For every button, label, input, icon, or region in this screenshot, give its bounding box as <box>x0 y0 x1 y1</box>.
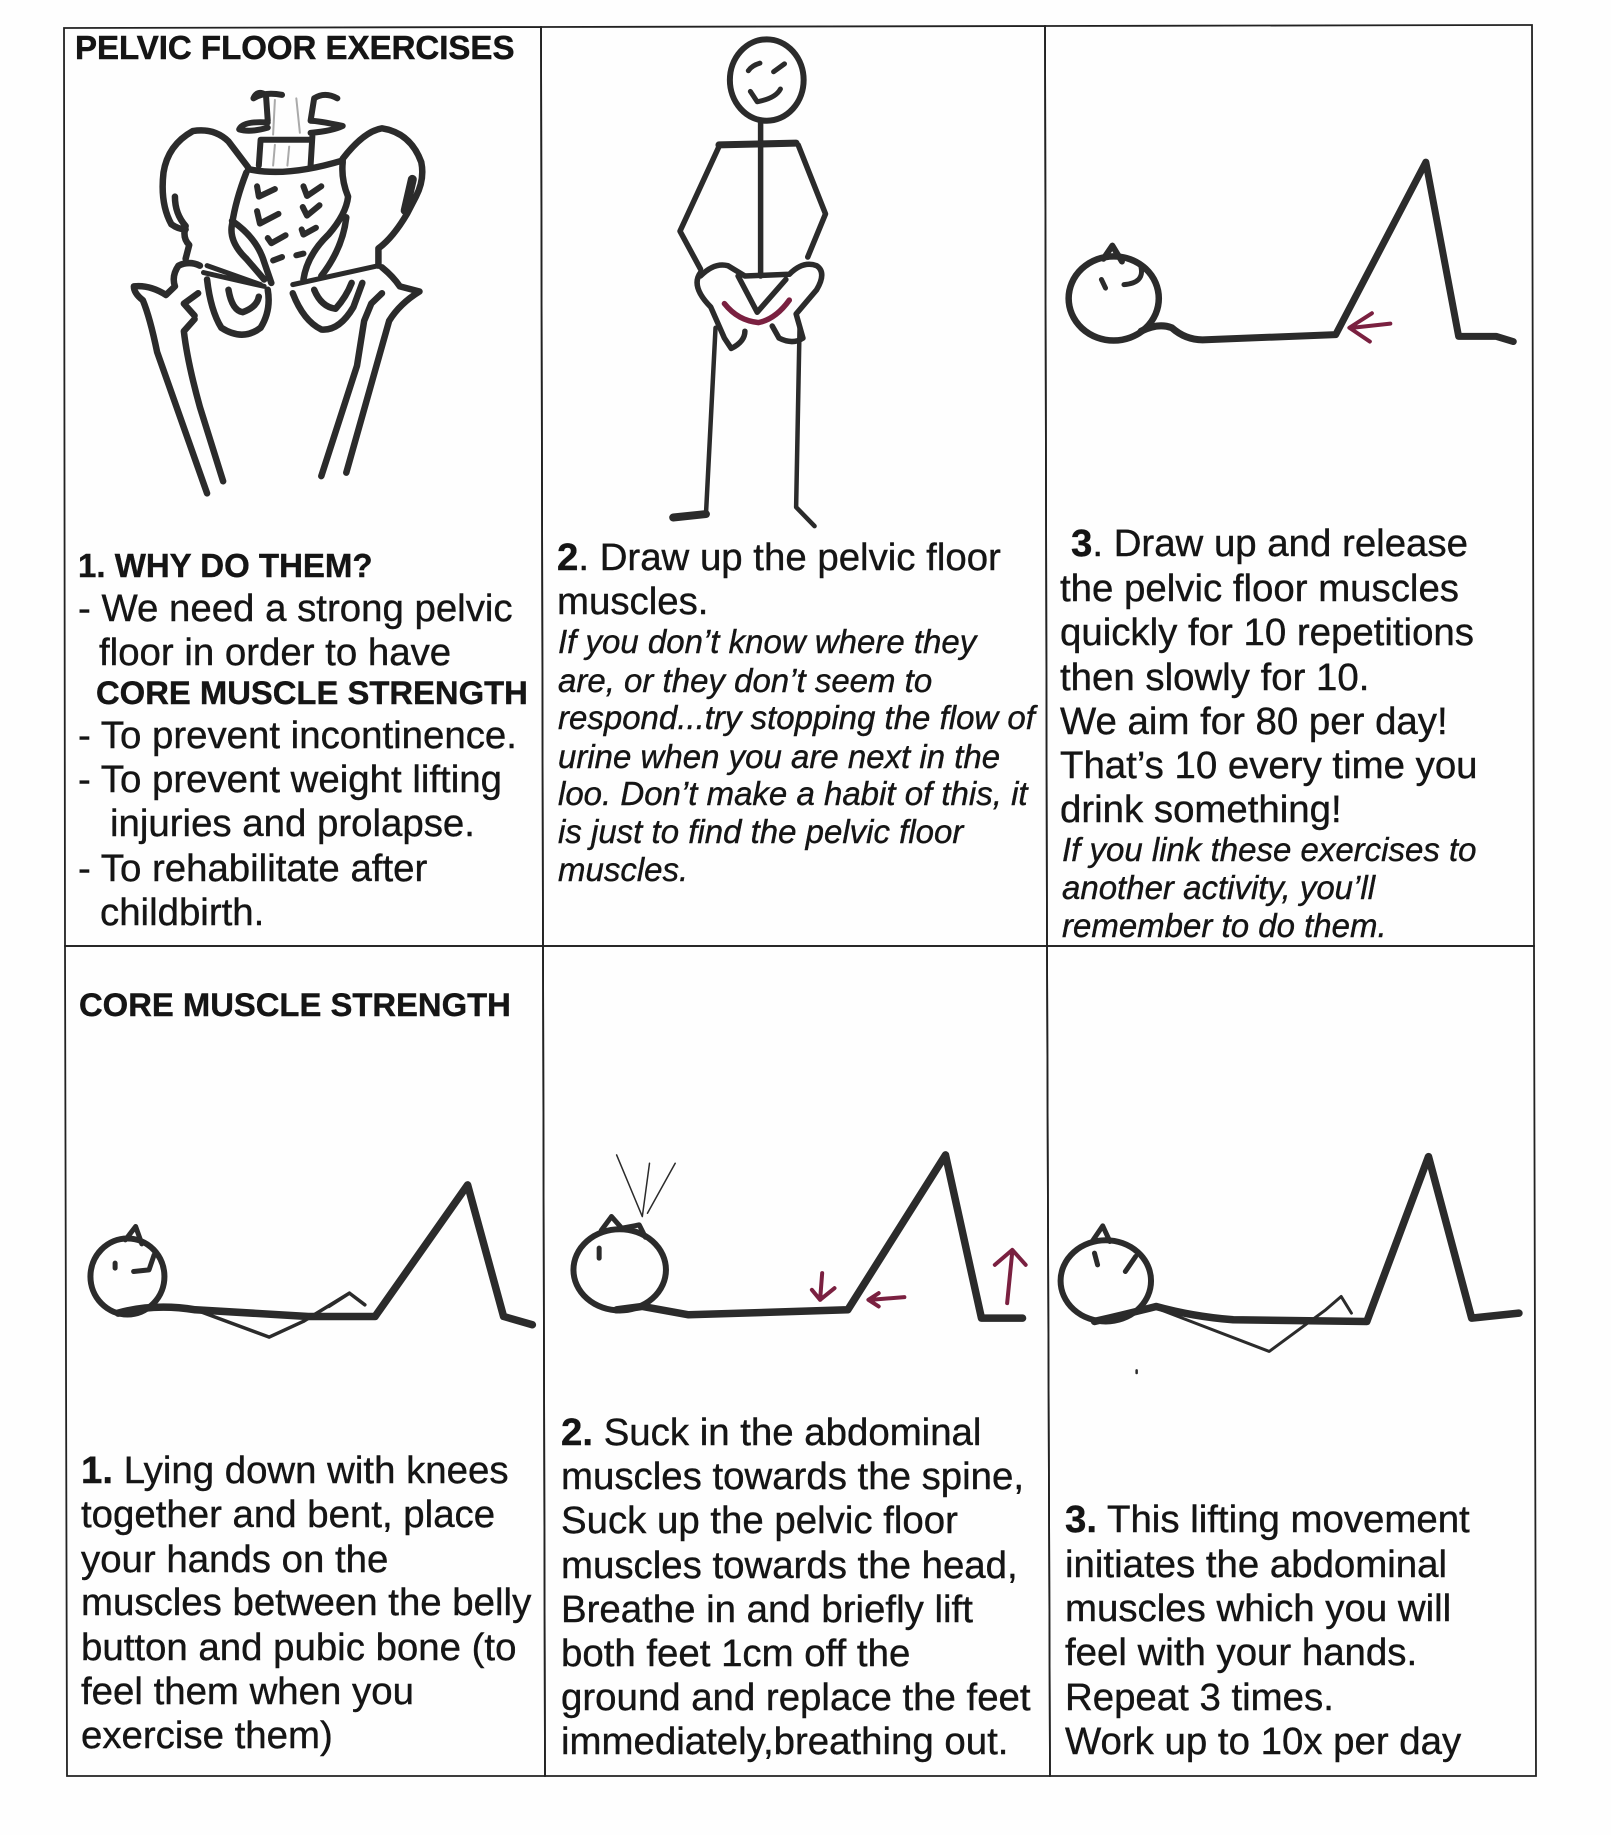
text block: why do them: - We need a strong pelvic <box>78 587 513 630</box>
text block: core step 1 <box>81 1449 532 1757</box>
text block: why do them: - To prevent weight lifting <box>78 758 502 801</box>
text block: step 2: 2. Draw up the pelvic floor <box>557 536 1001 579</box>
text block: core step 3: muscles which you will <box>1065 1587 1451 1630</box>
text block: core step 2: immediately,breathing out. <box>561 1720 1008 1763</box>
icon: lying figure hands raised <box>1061 1157 1519 1373</box>
text block: step 3 <box>1060 522 1478 944</box>
text block: core step 1: muscles between the belly <box>81 1581 532 1624</box>
text block: why do them: childbirth. <box>100 891 264 934</box>
text block: core step 2 <box>561 1411 1031 1763</box>
text block: why do them: 1. WHY DO THEM? <box>78 547 373 584</box>
text block: step 3: That’s 10 every time you <box>1060 744 1478 787</box>
text block: core step 3: 3. This lifting movement <box>1065 1498 1470 1541</box>
text block: core step 1: exercise them) <box>81 1714 333 1757</box>
text block: core step 2: muscles towards the spine, <box>561 1455 1024 1498</box>
text block: core step 1: your hands on the <box>81 1538 388 1581</box>
text block: step 3: the pelvic floor muscles <box>1060 567 1459 610</box>
text block: core step 2: Suck up the pelvic floor <box>561 1499 958 1542</box>
panel: core step 1 <box>65 946 545 1776</box>
panel: core step 3 <box>1047 946 1536 1776</box>
text block: core step 3: Work up to 10x per day <box>1065 1720 1462 1763</box>
panel: why do them <box>64 27 543 946</box>
text block: step 2: respond...try stopping the flow of <box>558 699 1039 736</box>
text block: step 2: urine when you are next in the <box>558 738 1000 775</box>
text block: step 3: then slowly for 10. <box>1060 656 1369 699</box>
text block: core step 2: 2. Suck in the abdominal <box>561 1411 981 1454</box>
text block: why do them: injuries and prolapse. <box>110 802 475 845</box>
text block: step 2: muscles. <box>557 580 708 623</box>
panel: draw up the pelvic floor <box>541 26 1047 946</box>
text block: step 2: is just to find the pelvic floor <box>558 813 965 850</box>
panel: draw up and release <box>1045 25 1534 946</box>
text block: core step 1: feel them when you <box>81 1670 414 1713</box>
text block: core step 1: button and pubic bone (to <box>81 1626 516 1669</box>
text block: why do them: floor in order to have <box>99 631 451 674</box>
text block: step 3: another activity, you’ll <box>1062 869 1377 906</box>
text block: step 2: loo. Don’t make a habit of this, it <box>558 775 1029 812</box>
text block: core step 2: ground and replace the feet <box>561 1676 1031 1719</box>
text block: step 2 <box>557 536 1039 888</box>
text block: step 3: If you link these exercises to <box>1062 831 1477 868</box>
text block: core step 3: initiates the abdominal <box>1065 1543 1447 1586</box>
text block: why do them: - To prevent incontinence. <box>78 714 517 757</box>
icon: lying figure hands on belly <box>90 1185 532 1337</box>
icon: lying figure with knee arrow <box>1069 162 1513 342</box>
text block: core step 2: muscles towards the head, <box>561 1544 1018 1587</box>
icon: standing stick figure <box>673 39 825 526</box>
text block: step 3: We aim for 80 per day! <box>1060 700 1448 743</box>
text block: core step 3: feel with your hands. <box>1065 1631 1417 1674</box>
text block: core step 2: Breathe in and briefly lift <box>561 1588 973 1631</box>
icon: lying figure lifting feet <box>573 1155 1026 1318</box>
text block: step 3: quickly for 10 repetitions <box>1060 611 1474 654</box>
text block: why do them: - To rehabilitate after <box>78 847 427 890</box>
text block: core step 1: 1. Lying down with knees <box>81 1449 509 1492</box>
icon: pelvis and femurs drawing <box>134 93 422 493</box>
text block: core step 1: together and bent, place <box>81 1493 495 1536</box>
title: PELVIC FLOOR EXERCISES <box>75 29 514 66</box>
panel: core step 2 <box>543 946 1050 1776</box>
text block: step 3: 3. Draw up and release <box>1071 522 1468 565</box>
text block: core step 3 <box>1065 1498 1470 1763</box>
heading: core muscle strength: CORE MUSCLE STRENGTH <box>79 986 511 1023</box>
text block: step 2: are, or they don’t seem to <box>558 662 932 699</box>
text block: step 2: If you don’t know where they <box>558 623 979 660</box>
text block: step 2: muscles. <box>558 851 688 888</box>
text block: why do them <box>78 547 528 934</box>
text block: why do them: CORE MUSCLE STRENGTH <box>96 674 528 711</box>
text block: core step 2: both feet 1cm off the <box>561 1632 910 1675</box>
text block: core step 3: Repeat 3 times. <box>1065 1676 1334 1719</box>
text block: step 3: drink something! <box>1060 788 1342 831</box>
text block: step 3: remember to do them. <box>1062 907 1387 944</box>
